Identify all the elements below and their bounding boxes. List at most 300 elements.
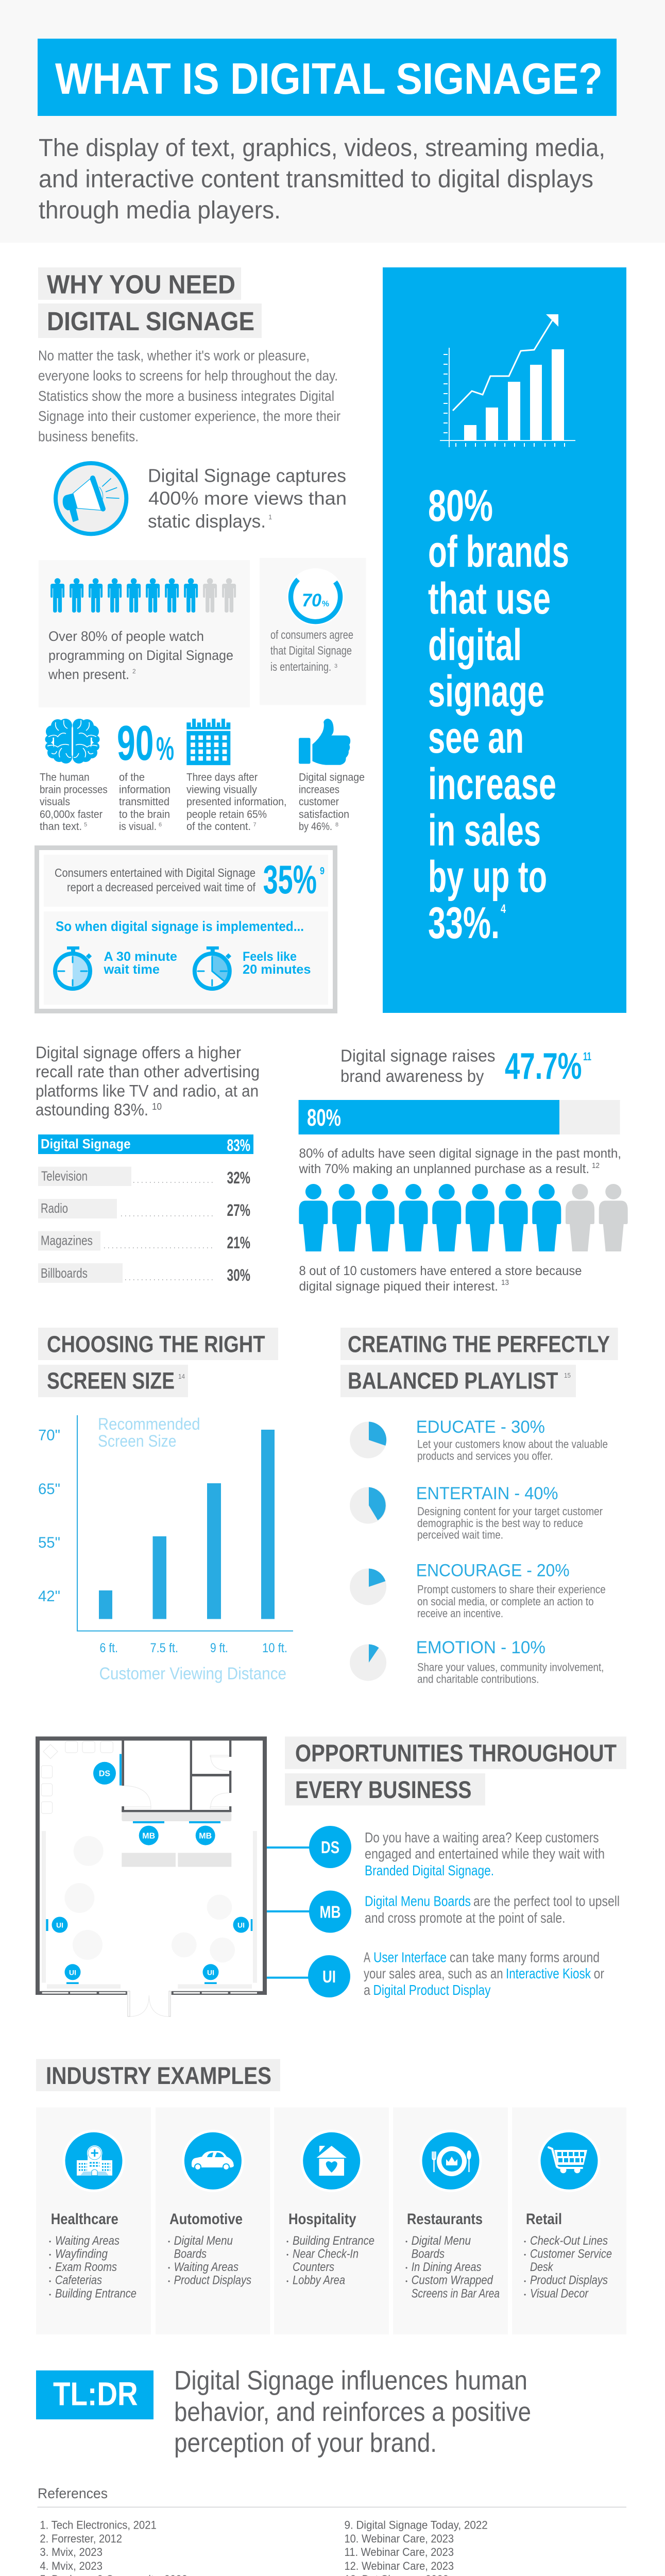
headline stat: 80% — [428, 481, 493, 531]
marker: UI lower right — [203, 1964, 218, 1980]
list: • — [286, 2278, 288, 2285]
row: television — [38, 1166, 250, 1187]
people icons: 8 of 10 customers — [299, 1184, 628, 1251]
text: adults have seen: 80% of adults have seen digital signage in the past month, — [299, 1146, 621, 1161]
card title: Automotive — [169, 2211, 243, 2228]
list: Custom Wrapped — [412, 2274, 493, 2287]
playlist: encourage: receive an incentive. — [417, 1607, 503, 1620]
list: Visual Decor — [530, 2287, 589, 2301]
playlist: educate: Let your customers know about the valuable — [417, 1437, 608, 1451]
TL:DR badge — [36, 2370, 154, 2419]
panel: perceived wait time — [37, 848, 335, 1011]
ring chart 70 percent — [291, 572, 340, 622]
text: entered a store: 13 — [501, 1278, 509, 1287]
heading: choosing the right screen size: CHOOSING THE RIGHT — [47, 1331, 265, 1357]
stat: 90 percent: 90 — [117, 716, 154, 771]
sub-panel: 35 percent stat: 9 — [320, 866, 325, 877]
pie: 40 percent — [350, 1487, 386, 1524]
intro text: The display of text, graphics, videos, streaming media, — [39, 134, 605, 162]
stat: 400% more views: 1 — [268, 513, 272, 521]
stat: brand awareness 47.7 percent: 11 — [583, 1050, 591, 1063]
list: • — [524, 2251, 526, 2259]
chart bars — [99, 1430, 275, 1619]
paragraph: why digital signage: everyone looks to screens for help throughout the day. — [38, 368, 338, 383]
list: Screens in Bar Area — [412, 2287, 500, 2301]
list: • — [168, 2278, 170, 2285]
text: over 80 percent: 2 — [132, 668, 136, 675]
playlist: entertain: Designing content for your target customer — [417, 1505, 603, 1518]
list: • — [405, 2238, 407, 2245]
list: • — [49, 2264, 51, 2272]
y axis labels: 55" — [38, 1534, 60, 1551]
icon: thumbs up — [299, 719, 350, 765]
furniture — [41, 1741, 257, 2016]
marker: DS — [93, 1762, 116, 1785]
heading: why you need digital signage — [38, 267, 262, 338]
headline stat: see an — [428, 713, 524, 762]
TL:DR summary text: Digital Signage influences human — [174, 2366, 527, 2396]
heading: why you need digital signage: WHY YOU NEED — [47, 270, 235, 299]
screen markers — [46, 1754, 252, 1984]
list — [49, 2234, 137, 2301]
text: entered a store: 8 out of 10 customers have entered a store because — [299, 1264, 582, 1278]
text: human brain: visuals — [40, 796, 70, 808]
x axis labels: 6 ft. — [100, 1641, 118, 1655]
text: customer satisfaction — [299, 771, 365, 833]
text: higher recall rate — [36, 1043, 260, 1119]
marker: DS: DS — [99, 1769, 110, 1778]
row: magazines — [38, 1231, 250, 1252]
text: information transmitted: 6 — [159, 822, 162, 828]
y axis labels — [38, 1427, 60, 1605]
text: feels like 20 minutes: 20 minutes — [243, 962, 311, 977]
list: Cafeterias — [55, 2274, 102, 2287]
paragraph: why digital signage: Statistics show the more a business integrates Digital — [38, 388, 334, 404]
list: • — [49, 2251, 51, 2259]
panel: 80 percent watch — [39, 560, 250, 707]
stat: 90 percent: % — [156, 730, 174, 767]
references list left: 4. Mvix, 2023 — [40, 2560, 103, 2572]
list: • — [524, 2291, 526, 2298]
text: information transmitted: transmitted — [119, 796, 169, 808]
card title: Healthcare — [51, 2211, 118, 2228]
sub-panel: 35 percent stat: report a decreased perceived wait time of — [67, 880, 256, 894]
list: Digital Menu — [174, 2234, 233, 2248]
bar: 80 percent of adults — [299, 1100, 620, 1134]
headline stat: by up to — [428, 852, 547, 902]
callout: digital signage: DS — [321, 1838, 339, 1857]
text: 30 minute wait: A 30 minute — [104, 950, 177, 964]
heading: opportunities throughout every business — [285, 1736, 626, 1805]
card: automotive — [156, 2107, 270, 2334]
headline stat: digital — [428, 620, 522, 670]
playlist: emotion: and charitable contributions. — [417, 1673, 539, 1686]
playlist: encourage: ENCOURAGE - 20% — [416, 1561, 570, 1581]
sub-panel: 35 percent stat: 35% — [263, 857, 317, 902]
text: customer satisfaction: Digital signage — [299, 771, 365, 783]
text: human brain: brain processes — [40, 784, 108, 795]
stat: brand awareness 47.7 percent: brand awareness by — [340, 1066, 484, 1086]
row: billboards — [38, 1263, 250, 1284]
icon: house — [302, 2131, 362, 2191]
icon: plate — [421, 2131, 481, 2191]
references list right: 11. Webinar Care, 2023 — [344, 2546, 454, 2558]
text: adults have seen: with 70% making an unplanned purchase as a result. — [299, 1162, 589, 1176]
heading: opportunities throughout every business: EVERY BUSINESS — [295, 1776, 472, 1803]
TL:DR badge: TL:DR — [53, 2376, 138, 2413]
heading: choosing the right screen size: SCREEN SIZE — [47, 1368, 175, 1394]
references list right — [344, 2519, 488, 2576]
icon: megaphone — [56, 463, 126, 534]
text: over 80 percent: Over 80% of people watch — [48, 629, 204, 644]
row: magazines: 21% — [227, 1233, 250, 1252]
sub-panel: when implemented: So when digital signage is implemented... — [56, 919, 304, 934]
text: three days after — [186, 771, 286, 833]
pie: 20 percent — [350, 1568, 386, 1605]
heading: opportunities throughout every business: OPPORTUNITIES THROUGHOUT — [295, 1739, 617, 1767]
y axis labels: 70" — [38, 1427, 60, 1444]
paragraph: why digital signage: No matter the task, whether it's work or pleasure, — [38, 348, 310, 364]
list — [524, 2234, 612, 2301]
card title: Restaurants — [407, 2211, 483, 2228]
playlist: educate: products and services you offer. — [417, 1450, 553, 1463]
list — [168, 2234, 251, 2287]
text: three days after: Three days after — [186, 771, 258, 783]
list: Wayfinding — [55, 2247, 108, 2261]
row: radio: Radio — [41, 1200, 68, 1216]
heading: creating the perfectly balanced playlist: CREATING THE PERFECTLY — [348, 1331, 610, 1357]
list: Exam Rooms — [55, 2260, 117, 2274]
list: Boards — [174, 2247, 207, 2261]
playlist: entertain: ENTERTAIN - 40% — [416, 1484, 558, 1503]
list: Product Displays — [174, 2274, 251, 2287]
row: digital signage — [38, 1134, 253, 1155]
marker: UI lower left: UI — [69, 1968, 76, 1976]
list: • — [49, 2278, 51, 2285]
references list right: 9. Digital Signage Today, 2022 — [344, 2519, 488, 2532]
ring chart 70 percent: 70 — [302, 590, 322, 611]
sub-panel: when implemented — [44, 911, 328, 1005]
row: billboards: Billboards — [41, 1265, 88, 1281]
stat: 400% more views: Digital Signage captures — [148, 465, 346, 486]
text: human brain: 60,000x faster — [40, 808, 103, 820]
text: three days after: of the content. — [186, 821, 251, 833]
text: human brain: The human — [40, 771, 90, 783]
paragraph: why digital signage: Signage into their customer experience, the more their — [38, 408, 340, 424]
text: customer satisfaction: increases — [299, 784, 339, 795]
icon: calendar — [186, 719, 230, 765]
list: Building Entrance — [55, 2287, 137, 2301]
list: Boards — [412, 2247, 445, 2261]
headline stat: 33%. — [428, 899, 500, 948]
icon: hospital — [64, 2131, 124, 2191]
paragraph: why digital signage: business benefits. — [38, 429, 139, 444]
x axis labels: 10 ft. — [262, 1641, 287, 1655]
walls — [36, 1736, 267, 1995]
text: customer satisfaction: customer — [299, 796, 339, 808]
playlist: encourage: Prompt customers to share their experience — [417, 1583, 606, 1596]
text: information transmitted: information — [119, 784, 170, 795]
list: • — [524, 2278, 526, 2285]
list: • — [524, 2238, 526, 2245]
text: three days after: people retain 65% — [186, 808, 267, 820]
text: consumers agree — [270, 628, 353, 673]
text: over 80 percent: when present. — [48, 667, 129, 682]
list: • — [286, 2238, 288, 2245]
callout: digital signage: engaged and entertained while they wait with — [365, 1846, 605, 1862]
text: over 80 percent — [48, 629, 233, 682]
TL:DR summary text: perception of your brand. — [174, 2428, 437, 2458]
card: hospitality — [274, 2107, 389, 2334]
playlist: entertain — [350, 1484, 603, 1541]
text: three days after: 7 — [253, 822, 257, 828]
callout: digital signage: Do you have a waiting area? Keep customers — [365, 1829, 599, 1845]
text: higher recall rate: 10 — [152, 1101, 162, 1112]
pie: 10 percent — [350, 1645, 386, 1681]
references list left: 2. Forrester, 2012 — [40, 2532, 122, 2545]
icon: stopwatch 30 minutes — [55, 946, 92, 989]
playlist: encourage — [350, 1561, 606, 1620]
row: television: 32% — [227, 1168, 250, 1187]
list: Building Entrance — [293, 2234, 374, 2248]
callout: menu boards: MB — [319, 1902, 341, 1922]
marker: MB left: MB — [142, 1832, 155, 1840]
card title: Hospitality — [288, 2211, 356, 2228]
callout: digital signage: Branded Digital Signage. — [365, 1862, 494, 1878]
text: three days after: viewing visually — [186, 784, 257, 795]
y axis title — [98, 1415, 200, 1450]
bar: 80 percent of adults: 80% — [307, 1104, 341, 1131]
heading: choosing the right screen size: 14 — [178, 1372, 185, 1380]
text: consumers agree: 3 — [334, 663, 337, 669]
callout: user interface: or — [594, 1965, 604, 1981]
y axis labels: 65" — [38, 1481, 60, 1498]
list: Check-Out Lines — [530, 2234, 608, 2248]
text: information transmitted: of the — [119, 771, 145, 783]
text: consumers agree: of consumers agree — [270, 628, 353, 641]
stat: 400% more views: static displays. — [148, 511, 266, 532]
intro text: through media players. — [39, 197, 281, 224]
text: customer satisfaction: 8 — [335, 822, 338, 828]
marker: UI lower left — [65, 1964, 80, 1980]
y axis labels: 42" — [38, 1588, 60, 1605]
text: information transmitted: is visual. — [119, 821, 157, 833]
heading: creating the perfectly balanced playlist: 15 — [564, 1371, 571, 1379]
intro text: and interactive content transmitted to digital displays — [39, 166, 593, 193]
headline stat — [428, 481, 569, 948]
heading: industry examples: INDUSTRY EXAMPLES — [46, 2062, 271, 2089]
text: customer satisfaction: satisfaction — [299, 808, 349, 820]
text: entered a store: digital signage piqued their interest. — [299, 1279, 498, 1294]
list: • — [405, 2278, 407, 2285]
y axis title: Recommended — [98, 1415, 200, 1433]
marker: UI left: UI — [56, 1921, 63, 1929]
text: higher recall rate: recall rate than other advertising — [36, 1062, 260, 1081]
header background panel — [0, 0, 665, 243]
playlist: educate — [350, 1417, 608, 1463]
text: higher recall rate: astounding 83%. — [36, 1100, 148, 1119]
marker: MB left — [139, 1826, 159, 1845]
x axis labels: 9 ft. — [210, 1641, 228, 1655]
text: feels like 20 minutes: Feels like — [243, 950, 297, 964]
text: 30 minute wait: wait time — [103, 962, 160, 977]
list: • — [168, 2238, 170, 2245]
row: digital signage: Digital Signage — [41, 1136, 131, 1151]
row: billboards: 30% — [227, 1266, 250, 1284]
headline stat: in sales — [428, 806, 541, 855]
list: Counters — [293, 2260, 334, 2274]
chart: recall rate table — [38, 1134, 253, 1284]
text: human brain: 5 — [84, 822, 87, 828]
x axis title: Customer Viewing Distance — [99, 1664, 286, 1683]
icon: car — [183, 2131, 243, 2191]
row: digital signage: 83% — [227, 1136, 250, 1155]
callout: user interface: Interactive Kiosk — [506, 1965, 591, 1981]
list: Near Check-In — [293, 2247, 359, 2261]
text: three days after: presented information, — [186, 796, 286, 808]
playlist: emotion: EMOTION - 10% — [416, 1638, 545, 1657]
callout: menu boards: are the perfect tool to upsell — [473, 1893, 620, 1909]
text: consumers agree: is entertaining. — [270, 660, 331, 673]
row: magazines: Magazines — [41, 1233, 93, 1248]
icon: shopping cart — [539, 2131, 599, 2191]
headline stat: of brands — [428, 527, 569, 577]
headline stat: that use — [428, 574, 551, 623]
callout: user interface: Digital Product Display — [373, 1982, 490, 1998]
list: • — [286, 2251, 288, 2259]
list: Digital Menu — [412, 2234, 471, 2248]
list: Waiting Areas — [55, 2234, 120, 2248]
references list left: 1. Tech Electronics, 2021 — [40, 2519, 157, 2532]
list: • — [168, 2264, 170, 2272]
marker: UI lower right: UI — [207, 1968, 214, 1976]
card: healthcare — [36, 2107, 151, 2334]
text: information transmitted — [119, 771, 170, 833]
people icons: 8 of 10 — [50, 578, 236, 613]
headline stat: signage — [428, 667, 544, 716]
references heading: References — [38, 2485, 108, 2501]
callout: menu boards: Digital Menu Boards — [365, 1893, 471, 1909]
playlist: educate: EDUCATE - 30% — [416, 1417, 545, 1437]
marker: UI right — [233, 1917, 249, 1933]
text: entered a store — [299, 1264, 582, 1294]
sub-panel: 35 percent stat: Consumers entertained with Digital Signage — [55, 866, 255, 879]
stat: brand awareness 47.7 percent — [340, 1046, 591, 1087]
marker: MB right — [196, 1826, 215, 1845]
references list left — [40, 2519, 187, 2576]
stat: brand awareness 47.7 percent: 47.7% — [505, 1046, 582, 1087]
list: • — [405, 2264, 407, 2272]
callout: menu boards: and cross promote at the point of sale. — [365, 1910, 566, 1926]
text: human brain — [40, 771, 108, 833]
card: restaurants — [393, 2107, 508, 2334]
text: adults have seen — [299, 1146, 621, 1176]
callout: user interface — [267, 1949, 604, 1998]
icon: brain — [45, 719, 100, 764]
list: In Dining Areas — [412, 2260, 481, 2274]
row: radio: 27% — [227, 1201, 250, 1219]
callout: user interface: A — [364, 1949, 370, 1965]
text: adults have seen: 12 — [592, 1161, 600, 1170]
stat: brand awareness 47.7 percent: Digital signage raises — [340, 1046, 496, 1065]
panel: 70 percent entertaining — [260, 558, 366, 705]
playlist: emotion: Share your values, community involvement, — [417, 1661, 604, 1673]
callout: user interface: a — [364, 1982, 370, 1998]
heading: creating the perfectly balanced playlist: BALANCED PLAYLIST — [348, 1368, 558, 1394]
intro text — [39, 134, 605, 224]
list — [286, 2234, 374, 2287]
marker: MB right: MB — [199, 1832, 212, 1840]
panel: 80 percent of brands — [383, 267, 626, 1013]
list: Lobby Area — [293, 2274, 345, 2287]
playlist: entertain: perceived wait time. — [417, 1529, 503, 1541]
playlist: encourage: on social media, or complete an action to — [417, 1595, 594, 1608]
row: radio — [38, 1199, 250, 1219]
icon: growth chart — [440, 314, 575, 447]
marker: UI left — [52, 1917, 68, 1933]
text: higher recall rate: Digital signage offers a higher — [36, 1043, 241, 1062]
TL:DR summary text: behavior, and reinforces a positive — [174, 2397, 531, 2427]
text: feels like 20 minutes — [243, 950, 311, 977]
list: • — [49, 2238, 51, 2245]
floor plan — [36, 1736, 267, 2016]
text: human brain: than text. — [40, 821, 82, 833]
headline stat: increase — [428, 759, 556, 809]
callout: user interface: your sales area, such as an — [364, 1965, 503, 1981]
y axis title: Screen Size — [98, 1432, 176, 1450]
heading: choosing the right screen size — [38, 1328, 278, 1397]
card title: Retail — [526, 2211, 562, 2228]
stat: 400% more views: 400% more views than — [148, 488, 347, 509]
callout: digital signage — [267, 1826, 605, 1878]
text: over 80 percent: programming on Digital Signage — [48, 648, 233, 663]
callout: user interface: can take many forms around — [450, 1949, 600, 1965]
text: higher recall rate: platforms like TV and radio, at an — [36, 1082, 259, 1100]
ring chart 70 percent: % — [322, 600, 329, 608]
playlist: entertain: demographic is the best way to reduce — [417, 1517, 583, 1530]
list: Waiting Areas — [174, 2260, 238, 2274]
list — [405, 2234, 500, 2301]
text: 30 minute wait — [103, 950, 177, 977]
headline stat: 4 — [501, 902, 506, 916]
row: television: Television — [41, 1168, 88, 1184]
callout: user interface: User Interface — [373, 1949, 447, 1965]
x axis labels — [100, 1641, 287, 1655]
card: retail — [512, 2107, 626, 2334]
references list left: 3. Mvix, 2023 — [40, 2546, 103, 2558]
list: Product Displays — [530, 2274, 608, 2287]
x axis labels: 7.5 ft. — [150, 1641, 178, 1655]
heading: why you need digital signage: DIGITAL SIGNAGE — [47, 307, 254, 336]
icon: stopwatch 20 minutes — [195, 946, 231, 989]
list: Customer Service — [530, 2247, 612, 2261]
list: Desk — [530, 2260, 554, 2274]
references list right: 10. Webinar Care, 2023 — [344, 2532, 454, 2545]
chart: screen size by viewing distance — [38, 1415, 293, 1683]
list: • — [49, 2291, 51, 2298]
text: consumers agree: that Digital Signage — [270, 643, 352, 657]
title banner — [38, 39, 617, 116]
sub-panel: 35 percent stat — [44, 855, 328, 907]
text: information transmitted: to the brain — [119, 808, 170, 820]
playlist: emotion — [350, 1638, 604, 1686]
title banner: WHAT IS DIGITAL SIGNAGE? — [55, 55, 603, 104]
callout: menu boards — [267, 1891, 620, 1933]
references list right: 12. Webinar Care, 2023 — [344, 2560, 454, 2572]
heading: creating the perfectly balanced playlist — [340, 1328, 618, 1397]
text: customer satisfaction: by 46%. — [299, 821, 332, 833]
pie: 30 percent — [350, 1422, 386, 1458]
